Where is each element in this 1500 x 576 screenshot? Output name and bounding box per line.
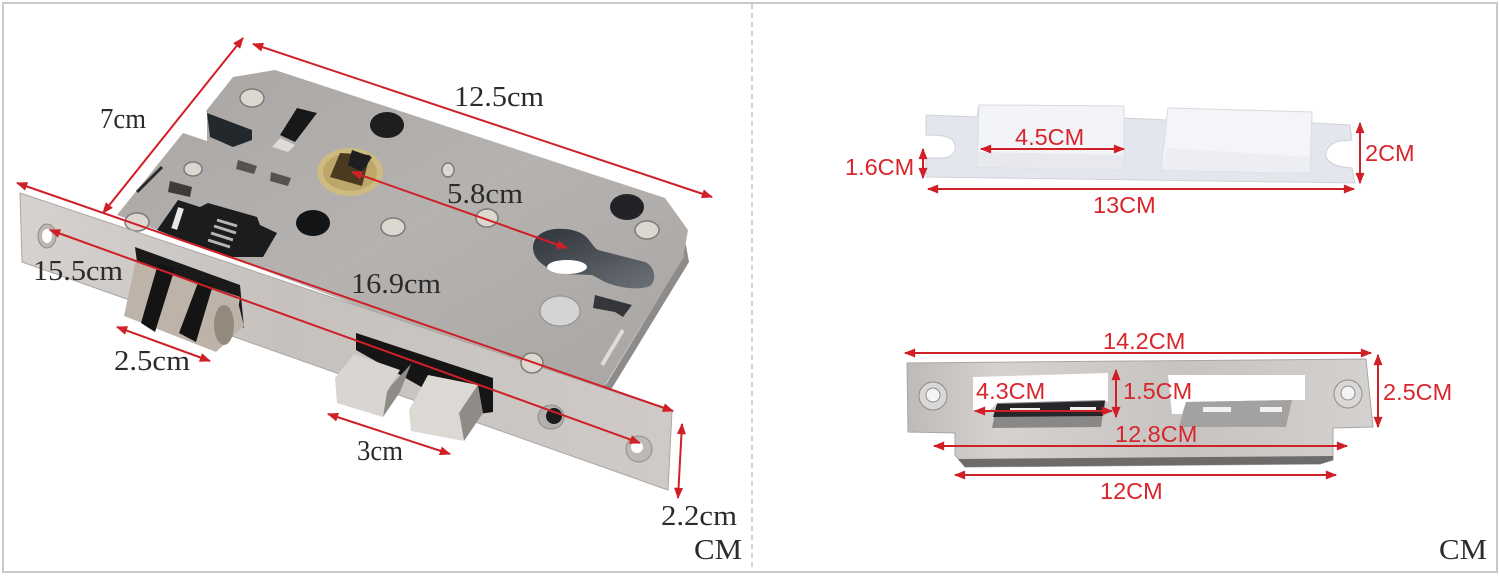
label: CM right: CM xyxy=(1439,534,1487,566)
arrow: 2.5cm xyxy=(117,327,210,361)
label: 15.5cm: 15.5cm xyxy=(33,255,123,287)
arrow: 12.5cm xyxy=(253,44,712,197)
arrow: 3cm xyxy=(328,414,450,454)
black round holes xyxy=(370,112,404,138)
arrow: 16.9cm xyxy=(17,183,673,411)
box bump right xyxy=(1161,108,1312,173)
arrow: 4.3CM xyxy=(975,410,1112,412)
label: 3cm: 3cm xyxy=(357,435,403,467)
lock case plate xyxy=(117,70,688,396)
strike window right xyxy=(1168,375,1305,414)
latch window with spring xyxy=(157,200,277,257)
small right slot xyxy=(593,295,632,317)
left bolt xyxy=(383,364,411,417)
strike tab left xyxy=(992,400,1105,428)
arrow: 2CM xyxy=(1359,123,1361,183)
right bolt xyxy=(459,385,483,441)
arrow: 15.5cm xyxy=(50,230,640,443)
label: 12CM: 12CM xyxy=(1100,478,1163,504)
rail slot xyxy=(602,330,623,365)
arrow: 7cm xyxy=(103,38,243,213)
euro cylinder keyhole xyxy=(533,229,654,288)
brass spindle hub xyxy=(317,148,383,196)
label: 2.5CM: 2.5CM xyxy=(1383,379,1452,405)
label: 1.5CM: 1.5CM xyxy=(1123,378,1192,404)
arrow: 5.8cm xyxy=(352,172,567,248)
label: CM left: CM xyxy=(694,534,742,566)
panel: metal strike plate xyxy=(907,359,1373,467)
label: 12.5cm: 12.5cm xyxy=(454,81,544,113)
box bump left xyxy=(977,105,1124,170)
label: 16.9cm: 16.9cm xyxy=(351,268,441,300)
arrow: 13CM xyxy=(928,188,1354,190)
panel: dead bolts xyxy=(335,333,493,441)
label: 7cm: 7cm xyxy=(100,103,146,135)
screws xyxy=(125,89,659,239)
label: 13CM: 13CM xyxy=(1093,192,1156,218)
label: 2CM: 2CM xyxy=(1365,140,1415,166)
faceplate screw xyxy=(521,353,543,373)
label: 5.8cm: 5.8cm xyxy=(447,178,523,210)
label: 14.2CM: 14.2CM xyxy=(1103,328,1185,354)
label: 12.8CM: 12.8CM xyxy=(1115,421,1197,447)
panel: latch bolt xyxy=(124,247,244,352)
faceplate mounting holes xyxy=(38,224,56,248)
silver round plug xyxy=(540,296,580,326)
arrow: 14.2CM xyxy=(905,352,1371,354)
arrow: 4.5CM xyxy=(981,148,1124,150)
small slots xyxy=(236,160,257,174)
arrow: 12.8CM xyxy=(934,445,1347,447)
arrow: 2.2cm xyxy=(678,424,682,498)
strike tab right xyxy=(1179,400,1292,427)
slide slot xyxy=(280,108,317,142)
arrow: 1.5CM xyxy=(1115,370,1117,417)
strike screw holes xyxy=(919,382,947,410)
lock case side edge xyxy=(598,240,689,398)
arrow: 1.6CM xyxy=(922,149,924,178)
label: 2.2cm: 2.2cm xyxy=(661,500,737,532)
label: 2.5cm: 2.5cm xyxy=(114,345,190,377)
arrow: 12CM xyxy=(955,474,1336,476)
strike window left xyxy=(973,373,1108,410)
label: 4.3CM: 4.3CM xyxy=(976,378,1045,404)
top edge notch xyxy=(207,113,252,147)
label: 1.6CM: 1.6CM xyxy=(845,154,914,180)
arrow: 2.5CM xyxy=(1377,355,1379,427)
label: 4.5CM: 4.5CM xyxy=(1015,124,1084,150)
panel: faceplate xyxy=(20,193,672,490)
panel: white plastic strike box xyxy=(926,105,1355,183)
panel: mortise lock body xyxy=(117,70,689,398)
